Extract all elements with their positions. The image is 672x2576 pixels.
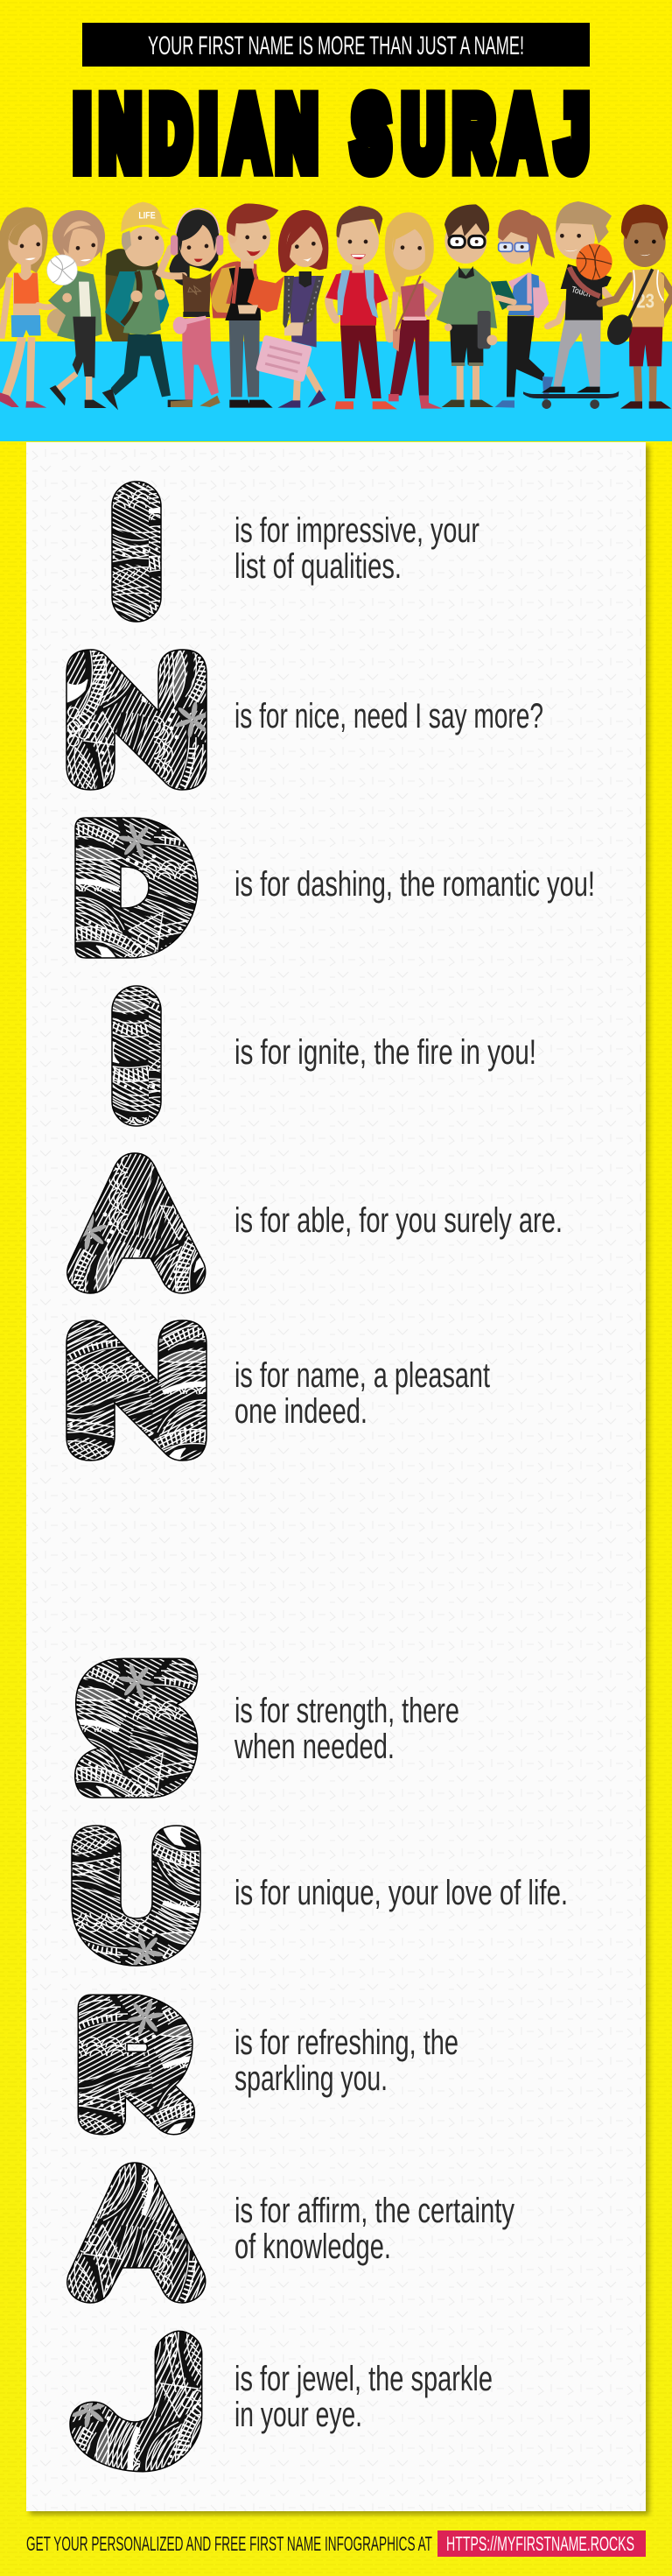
right half of crowd [326, 201, 672, 409]
row: D dashing [75, 818, 595, 958]
text block: when needed. [234, 1728, 395, 1766]
person 8: blonde girl [385, 212, 443, 409]
text: is for nice, need I say more? [234, 697, 543, 735]
text block [234, 2192, 514, 2266]
blue floor band [0, 341, 672, 441]
title: INDIAN SURAJ [74, 80, 588, 189]
person 10: girl with ponytail [491, 209, 555, 408]
text block: is for strength, there [234, 1692, 459, 1730]
text block: in your eye. [234, 2396, 362, 2434]
text block: is for name, a pleasant [234, 1356, 490, 1395]
zentangle letter I [112, 986, 161, 1126]
zentangle letter R [78, 1995, 194, 2135]
row: I impressive [112, 482, 480, 622]
zentangle letter A [67, 1153, 206, 1293]
person 11: skater boy with basketball [523, 201, 619, 409]
person 3: boy with cap and backpack [102, 202, 192, 410]
person 7: boy in red shirt [326, 206, 397, 409]
row: S strength [75, 1658, 459, 1798]
text block [234, 511, 480, 586]
person 11: skater boy with basketball: Touch [570, 285, 592, 299]
row: U unique [72, 1826, 568, 1966]
zentangle letter U [72, 1826, 200, 1966]
text block [234, 1692, 459, 1766]
url badge [438, 2530, 646, 2557]
person 9: boy with glasses [437, 204, 497, 407]
row: I ignite [112, 986, 536, 1126]
text block: is for impressive, your [234, 511, 480, 550]
row: A affirm [67, 2163, 514, 2303]
person 2: girl with volleyball [47, 210, 107, 408]
text block [234, 1356, 490, 1431]
left half of crowd [0, 202, 328, 410]
person 12: boy with curly hair: 23 [636, 290, 654, 313]
row: R refreshing [78, 1995, 458, 2135]
zentangle letter S [75, 1658, 198, 1798]
zentangle letter N [66, 650, 206, 790]
row: N name [66, 1320, 490, 1460]
text block: of knowledge. [234, 2228, 391, 2266]
icon: volleyball [47, 255, 77, 285]
zentangle letter J [70, 2331, 202, 2472]
text block: sparkling you. [234, 2059, 388, 2098]
person 6: redhead girl with pink bag [256, 210, 328, 408]
text block [234, 2023, 458, 2098]
text block: is for jewel, the sparkle [234, 2360, 493, 2398]
zentangle letter A [67, 2163, 206, 2303]
text block: list of qualities. [234, 547, 402, 586]
icon: skateboard [523, 391, 619, 409]
text block: is for affirm, the certainty [234, 2192, 514, 2230]
icon: basketball [576, 243, 612, 280]
white content panel [26, 442, 646, 2511]
person 4: girl with headphones [160, 208, 223, 407]
zentangle letter N [66, 1320, 206, 1460]
illustration: group of young people [0, 201, 672, 410]
person 5: boy with red backpack and book [210, 204, 284, 408]
row: A able [67, 1153, 563, 1293]
header banner [82, 23, 590, 67]
text: is for ignite, the fire in you! [234, 1033, 536, 1072]
row: J jewel [70, 2331, 493, 2472]
person 12: boy with curly hair [600, 204, 672, 409]
text block: one indeed. [234, 1392, 368, 1431]
text block [234, 2360, 493, 2434]
footer [26, 2530, 646, 2557]
text block: is for refreshing, the [234, 2023, 458, 2062]
row: N nice [66, 650, 543, 790]
person 3: boy with cap and backpack: LIFE [138, 210, 156, 221]
person 1: girl in orange top [0, 208, 66, 408]
zentangle letter D [75, 818, 198, 958]
zentangle letter I [112, 482, 161, 622]
